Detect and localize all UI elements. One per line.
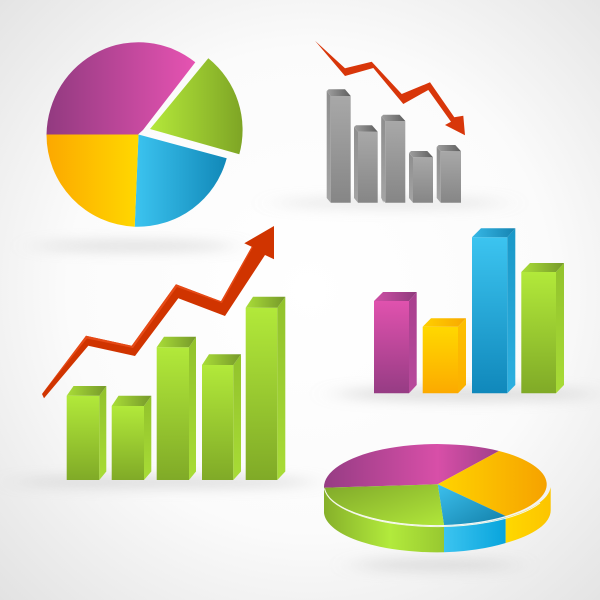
top: blue: [438, 484, 506, 525]
gray bar 2: [354, 125, 378, 203]
slice: green exploded: [150, 58, 243, 154]
floor shadows: [15, 197, 595, 571]
magenta bar: [374, 292, 417, 393]
green bar 4: [202, 354, 241, 480]
green bar: [521, 263, 564, 393]
side: yellow: [506, 487, 551, 543]
green bar 2: [112, 396, 151, 480]
slice: yellow: [46, 134, 138, 227]
falling gray bar chart: [327, 89, 461, 203]
green bar 3: [157, 337, 196, 480]
green rising bar chart: [67, 297, 285, 480]
blue bar: [472, 228, 515, 393]
3D pie chart: [324, 444, 551, 552]
side: blue: [444, 518, 506, 552]
gray bar 4: [409, 151, 433, 203]
green bar 5: [246, 297, 285, 480]
slice: blue: [135, 134, 227, 227]
yellow bar: [423, 318, 466, 393]
flat pie chart with exploded slice: [46, 42, 243, 227]
top: green: [324, 484, 444, 525]
slice: magenta: [46, 42, 195, 134]
arrow: falling red trend: [315, 41, 465, 135]
multicolor bar chart: [374, 228, 564, 393]
top: magenta: [324, 444, 499, 488]
arrow: rising red trend: [42, 226, 274, 398]
white rim: [324, 488, 540, 527]
gray bar 3: [381, 115, 405, 203]
side: green: [324, 488, 444, 552]
gray bar 1: [327, 89, 351, 203]
top: orange: [438, 451, 547, 516]
gray bar 5: [437, 145, 461, 203]
green bar 1: [67, 386, 106, 480]
